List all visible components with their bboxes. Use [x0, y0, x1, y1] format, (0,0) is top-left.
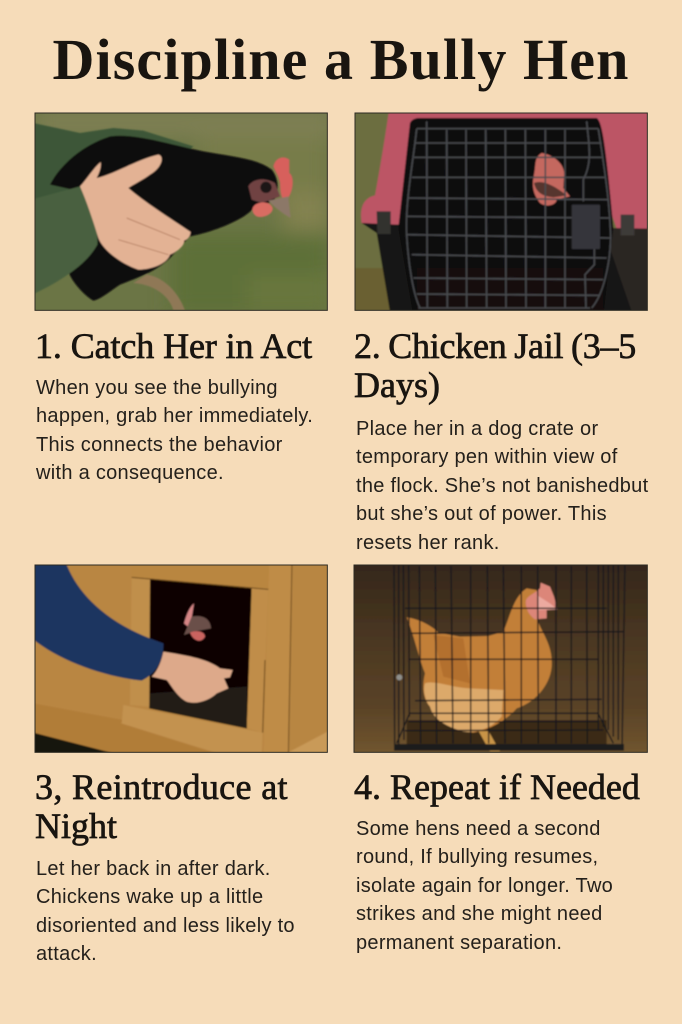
body text: Place her in a dog crate or — [356, 418, 598, 440]
body text: round, If bullying resumes, — [356, 846, 598, 868]
body text: temporary pen within view of — [356, 446, 618, 468]
body text: but she’s out of power. This — [356, 503, 607, 525]
body text: Some hens need a second — [356, 818, 601, 840]
body text: attack. — [36, 943, 97, 965]
heading: Night — [35, 806, 117, 846]
body text — [36, 377, 313, 484]
heading: Days) — [354, 365, 440, 405]
heading — [35, 767, 288, 846]
photo: hands holding a black hen — [34, 112, 328, 311]
body text: isolate again for longer. Two — [356, 875, 613, 897]
body text: Let her back in after dark. — [36, 858, 271, 880]
body text: disoriented and less likely to — [36, 915, 295, 937]
body text: resets her rank. — [356, 532, 500, 554]
photo: orange hen in a wire cage — [354, 564, 648, 753]
photo: hen inside a pink pet crate — [354, 112, 648, 311]
body text: When you see the bullying — [36, 377, 278, 399]
heading: 4. Repeat if Needed — [354, 767, 640, 807]
body text: with a consequence. — [36, 462, 224, 484]
panel: step 2 chicken jail — [354, 112, 648, 554]
heading: 3, Reintroduce at — [35, 767, 288, 807]
photo: arm reaching into a wooden coop door — [34, 564, 328, 753]
heading: 1. Catch Her in Act — [35, 326, 312, 366]
panel: step 3 reintroduce at night — [34, 564, 328, 965]
body text: the flock. She’s not banishedbut — [356, 475, 648, 497]
title: Discipline a Bully Hen — [53, 27, 629, 92]
heading: 2. Chicken Jail (3–5 — [354, 326, 636, 366]
body text: Chickens wake up a little — [36, 886, 263, 908]
panel: step 4 repeat if needed — [354, 564, 648, 954]
body text — [356, 418, 648, 554]
body text — [36, 858, 295, 965]
body text — [356, 818, 613, 954]
body text: This connects the behavior — [36, 434, 283, 456]
panel: step 1 catch her in act — [34, 112, 328, 484]
body text: permanent separation. — [356, 932, 562, 954]
body text: strikes and she might need — [356, 903, 603, 925]
body text: happen, grab her immediately. — [36, 405, 313, 427]
heading — [354, 326, 636, 406]
